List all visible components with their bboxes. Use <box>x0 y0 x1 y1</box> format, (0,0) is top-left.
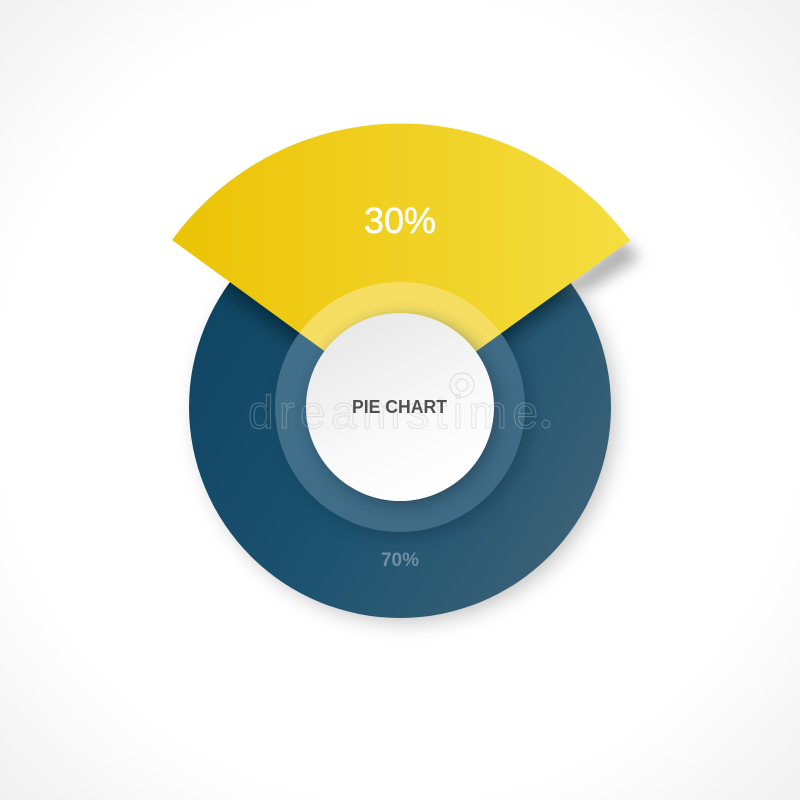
label: 30%: 30% <box>364 200 436 241</box>
shadow: yellow slice tail on background <box>560 238 640 290</box>
watermark: dreamstime <box>248 386 538 438</box>
center disc <box>306 313 498 506</box>
label: 70%: 70% <box>381 550 419 571</box>
shadow: yellow slice on blue ring <box>221 282 580 346</box>
label: PIE CHART: PIE CHART <box>352 397 447 417</box>
watermark <box>249 372 550 430</box>
inner ring: yellow translucent <box>300 282 501 352</box>
inner ring: blue translucent <box>275 282 531 538</box>
watermark: dreamstime <box>248 386 538 438</box>
slice: 30% yellow wedge <box>172 124 630 406</box>
shadow: outer ring <box>198 205 614 621</box>
slice: 70% blue ring <box>189 196 611 618</box>
pie chart <box>172 124 640 621</box>
